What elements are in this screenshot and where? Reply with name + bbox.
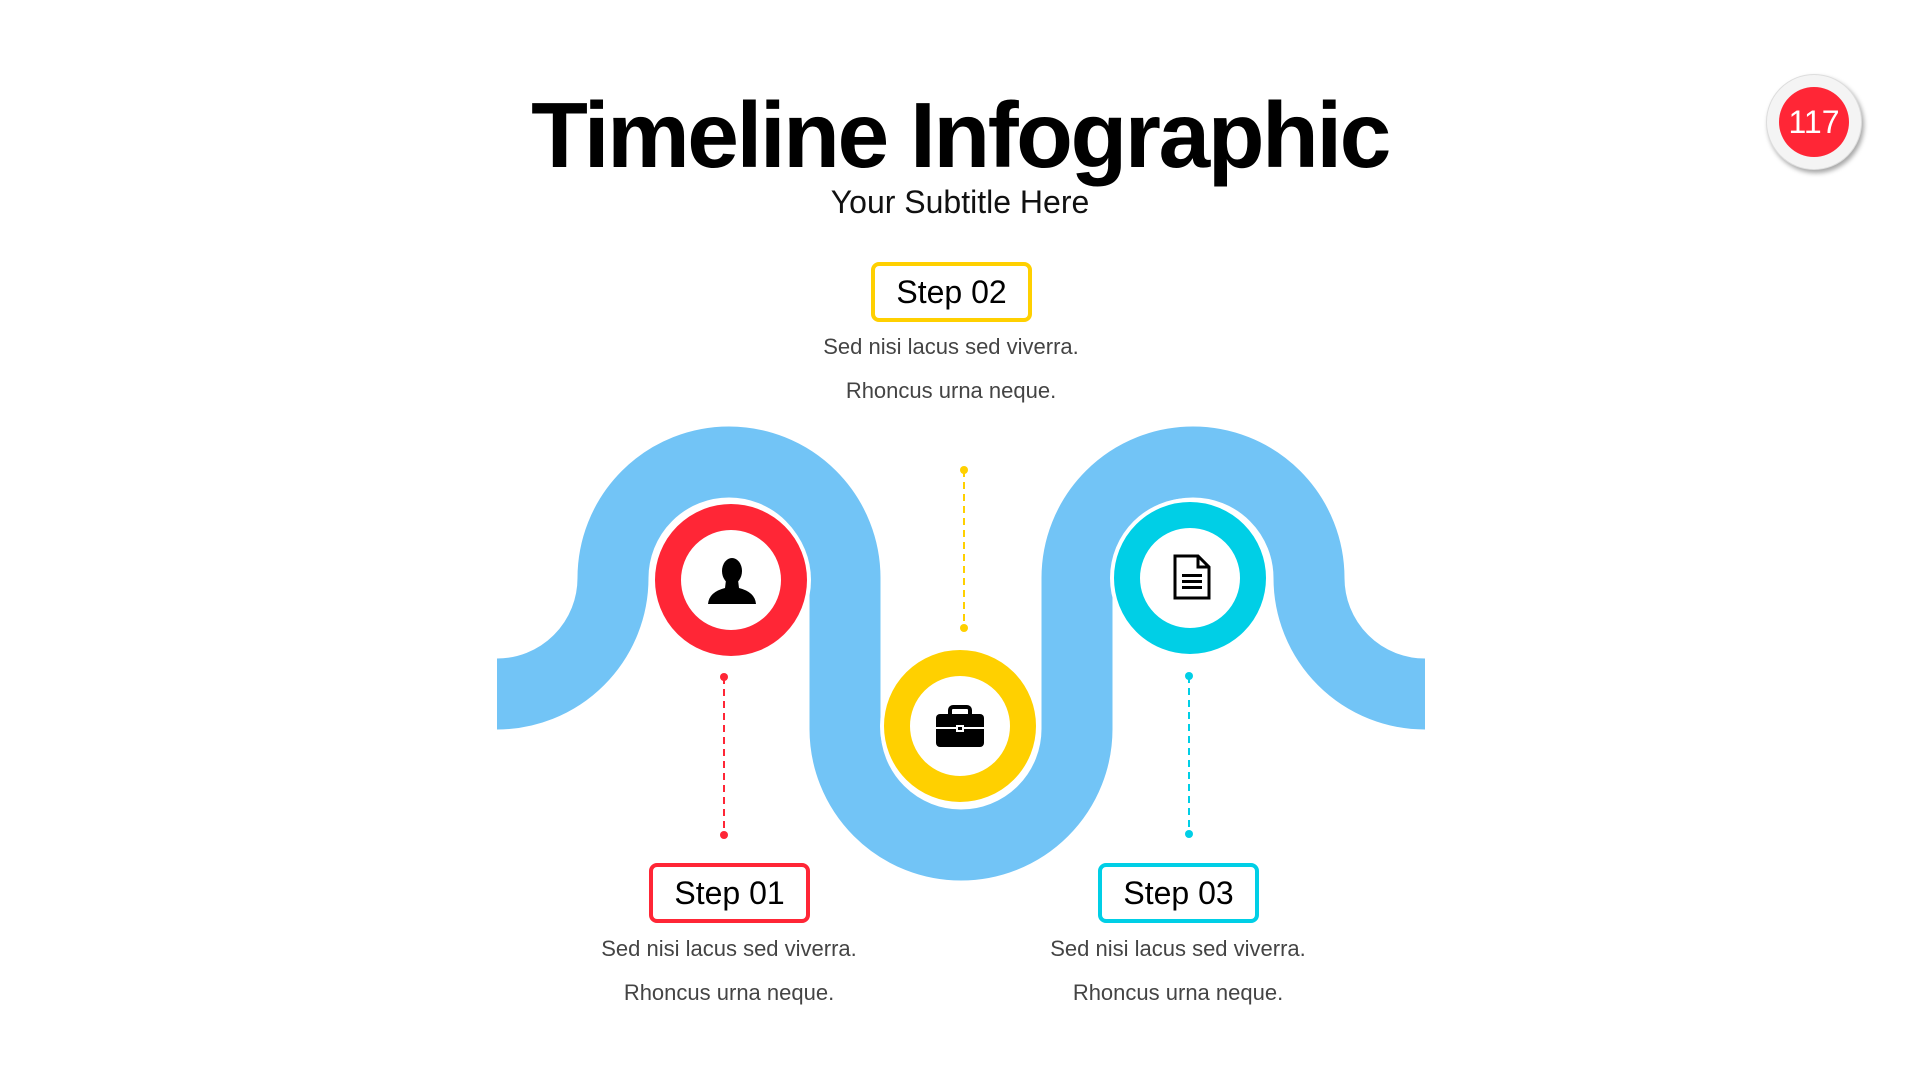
page badge: 117 — [1788, 104, 1840, 140]
step 03 label — [1098, 863, 1259, 923]
icon: document (step 03) — [1110, 498, 1270, 658]
step 01 text: Sed nisi lacus sed viverra. — [601, 936, 857, 961]
step 03 text — [1050, 936, 1306, 1005]
step 02 label — [871, 262, 1032, 322]
page badge — [1766, 74, 1862, 170]
step 03 label: Step 03 — [1123, 875, 1234, 911]
subtitle: Your Subtitle Here — [831, 184, 1089, 220]
step 03 text: Sed nisi lacus sed viverra. — [1050, 936, 1306, 961]
step 02 text — [823, 334, 1079, 403]
step 02 label: Step 02 — [896, 274, 1007, 310]
step 03 text: Rhoncus urna neque. — [1073, 980, 1283, 1005]
step 02 text: Rhoncus urna neque. — [846, 378, 1056, 403]
wave path — [497, 462, 1425, 845]
connector: step 02 — [960, 466, 968, 632]
step 01 label — [649, 863, 810, 923]
connector: step 01 — [720, 673, 728, 839]
icon: person (step 01) — [651, 500, 811, 660]
connector: step 03 — [1185, 672, 1193, 838]
icon: briefcase (step 02) — [880, 646, 1040, 806]
step 01 label: Step 01 — [674, 875, 785, 911]
step 02 text: Sed nisi lacus sed viverra. — [823, 334, 1079, 359]
step 01 text: Rhoncus urna neque. — [624, 980, 834, 1005]
step 01 text — [601, 936, 857, 1005]
title: Timeline Infographic — [531, 83, 1389, 187]
